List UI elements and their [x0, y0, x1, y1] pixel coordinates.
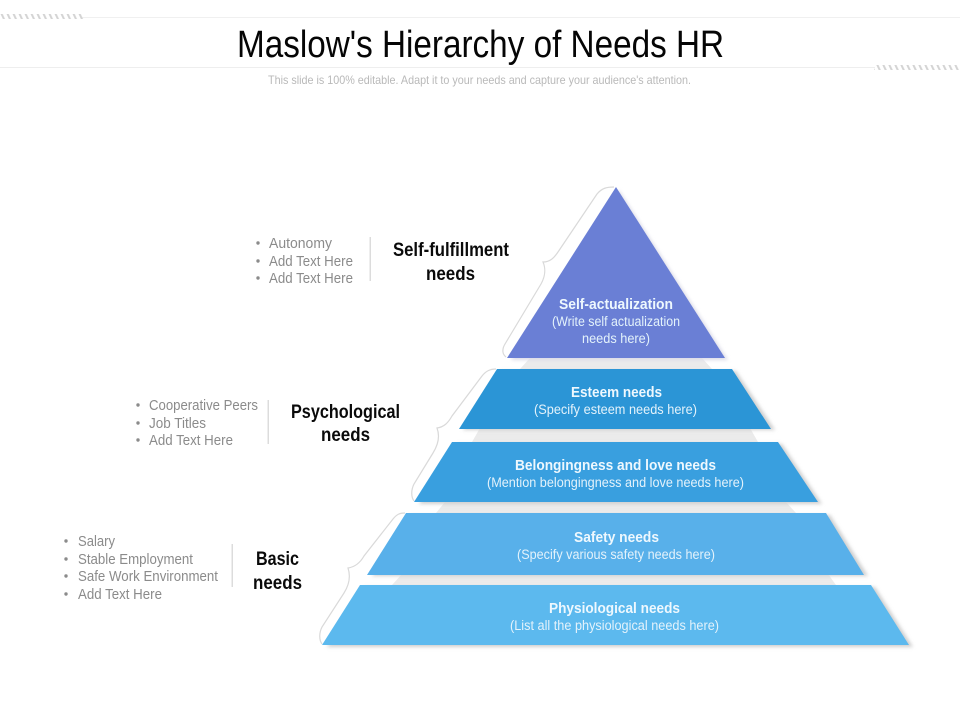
list: basic items: Stable Employment — [78, 551, 194, 568]
tier: physiological needs: (List all the physiological needs here) — [510, 618, 719, 633]
heading: psychological needs — [291, 402, 400, 446]
group: basic needs — [64, 533, 302, 603]
tier: esteem needs — [459, 369, 771, 429]
tier: safety needs — [367, 513, 864, 575]
heading: self-fulfillment needs: Self-fulfillment — [393, 240, 510, 261]
subtitle: This slide is 100% editable. Adapt it to your needs and capture your audience's attention. — [268, 73, 691, 87]
list: psychological items: Job Titles — [149, 415, 206, 432]
tier: belongingness and love needs: Belongingness and love needs — [515, 457, 716, 474]
list: self-fulfillment items: Add Text Here — [269, 253, 353, 270]
list: psychological items — [136, 397, 258, 449]
tier: esteem needs: Esteem needs — [571, 384, 662, 401]
heading: self-fulfillment needs: needs — [426, 264, 475, 285]
list: basic items: Salary — [78, 533, 115, 550]
list: self-fulfillment items: Add Text Here — [269, 270, 353, 287]
heading: psychological needs: needs — [321, 425, 370, 446]
tier: safety needs: Safety needs — [574, 529, 659, 546]
pyramid shadows and connectors — [327, 190, 913, 647]
tier: self-actualization: needs here) — [582, 331, 650, 346]
list: psychological items: Cooperative Peers — [149, 397, 258, 414]
tier: physiological needs: Physiological needs — [549, 600, 680, 617]
heading: basic needs: needs — [253, 573, 302, 594]
brace: psychological — [412, 369, 496, 501]
list: psychological items: Add Text Here — [149, 432, 233, 449]
panel: pyramid — [322, 187, 913, 647]
tier: self-actualization: (Write self actualization — [552, 314, 680, 329]
heading: psychological needs: Psychological — [291, 402, 400, 423]
divider — [370, 237, 371, 281]
heading: self-fulfillment needs — [393, 240, 510, 285]
heading: basic needs: Basic — [256, 549, 299, 570]
tier: self-actualization — [507, 187, 725, 358]
list: basic items: Add Text Here — [78, 586, 162, 603]
list: basic items: Safe Work Environment — [78, 568, 219, 585]
group: self-fulfillment needs — [256, 235, 510, 287]
divider — [232, 544, 233, 587]
tier: physiological needs — [322, 585, 909, 645]
group: psychological needs — [136, 397, 400, 449]
tier: belongingness and love needs: (Mention belongingness and love needs here) — [487, 475, 744, 490]
list: self-fulfillment items — [256, 235, 353, 287]
tier: safety needs: (Specify various safety needs here) — [517, 547, 715, 562]
heading: basic needs — [253, 549, 302, 594]
tier: belongingness and love needs — [414, 442, 818, 502]
brace: basic — [320, 513, 405, 644]
title: Maslow's Hierarchy of Needs HR — [237, 24, 724, 66]
tier: self-actualization: Self-actualization — [559, 296, 673, 313]
list: self-fulfillment items: Autonomy — [269, 235, 332, 252]
brace: self-fulfillment — [503, 187, 614, 357]
tier: esteem needs: (Specify esteem needs here) — [534, 402, 697, 417]
list: basic items — [64, 533, 219, 603]
divider — [268, 400, 269, 444]
